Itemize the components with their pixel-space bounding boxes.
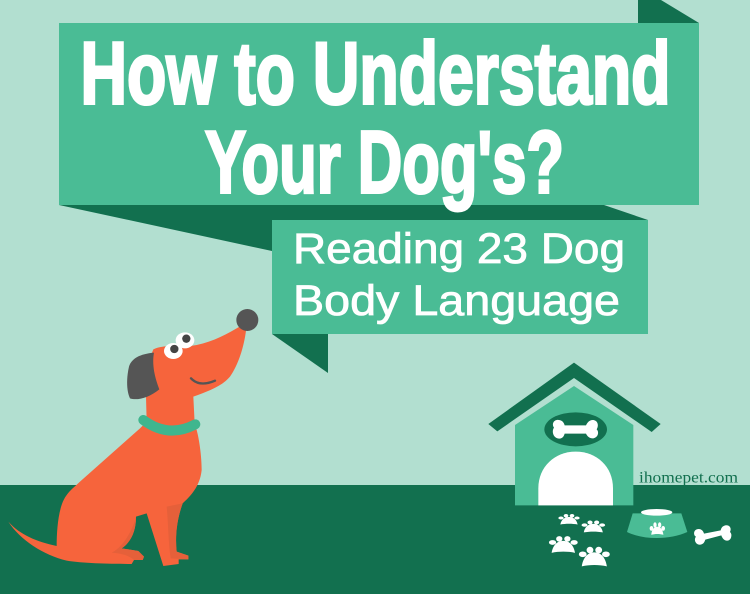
subtitle: [293, 225, 625, 325]
dog nose: [236, 309, 258, 331]
watermark: ihomepet.com: [639, 470, 739, 486]
dog house: [488, 363, 731, 566]
subtitle banner: [272, 220, 648, 334]
title banner: [59, 23, 699, 212]
title: Your Dog's?: [205, 112, 564, 212]
bowl paw: [650, 522, 665, 535]
dog collar: [143, 420, 195, 431]
dog far legs shading: [167, 503, 188, 559]
subtitle banner fold: [272, 334, 328, 373]
top banner fold: [638, 0, 699, 23]
dog mouth: [191, 378, 215, 384]
ground: [0, 485, 750, 594]
dog body: [8, 326, 246, 566]
bone sign: [544, 412, 607, 446]
subtitle: Reading 23 Dog: [293, 225, 625, 273]
dog ear: [127, 353, 159, 399]
dog illustration: [8, 309, 258, 566]
dog eyes: [164, 332, 194, 359]
lower banner fold: [59, 205, 648, 251]
subtitle: Body Language: [293, 277, 620, 325]
house door: [538, 452, 613, 505]
house body: [515, 386, 633, 505]
bone: [694, 525, 731, 545]
paw prints: [549, 514, 610, 566]
house roof: [488, 363, 661, 432]
title: [80, 24, 670, 212]
food bowl: [627, 509, 687, 538]
